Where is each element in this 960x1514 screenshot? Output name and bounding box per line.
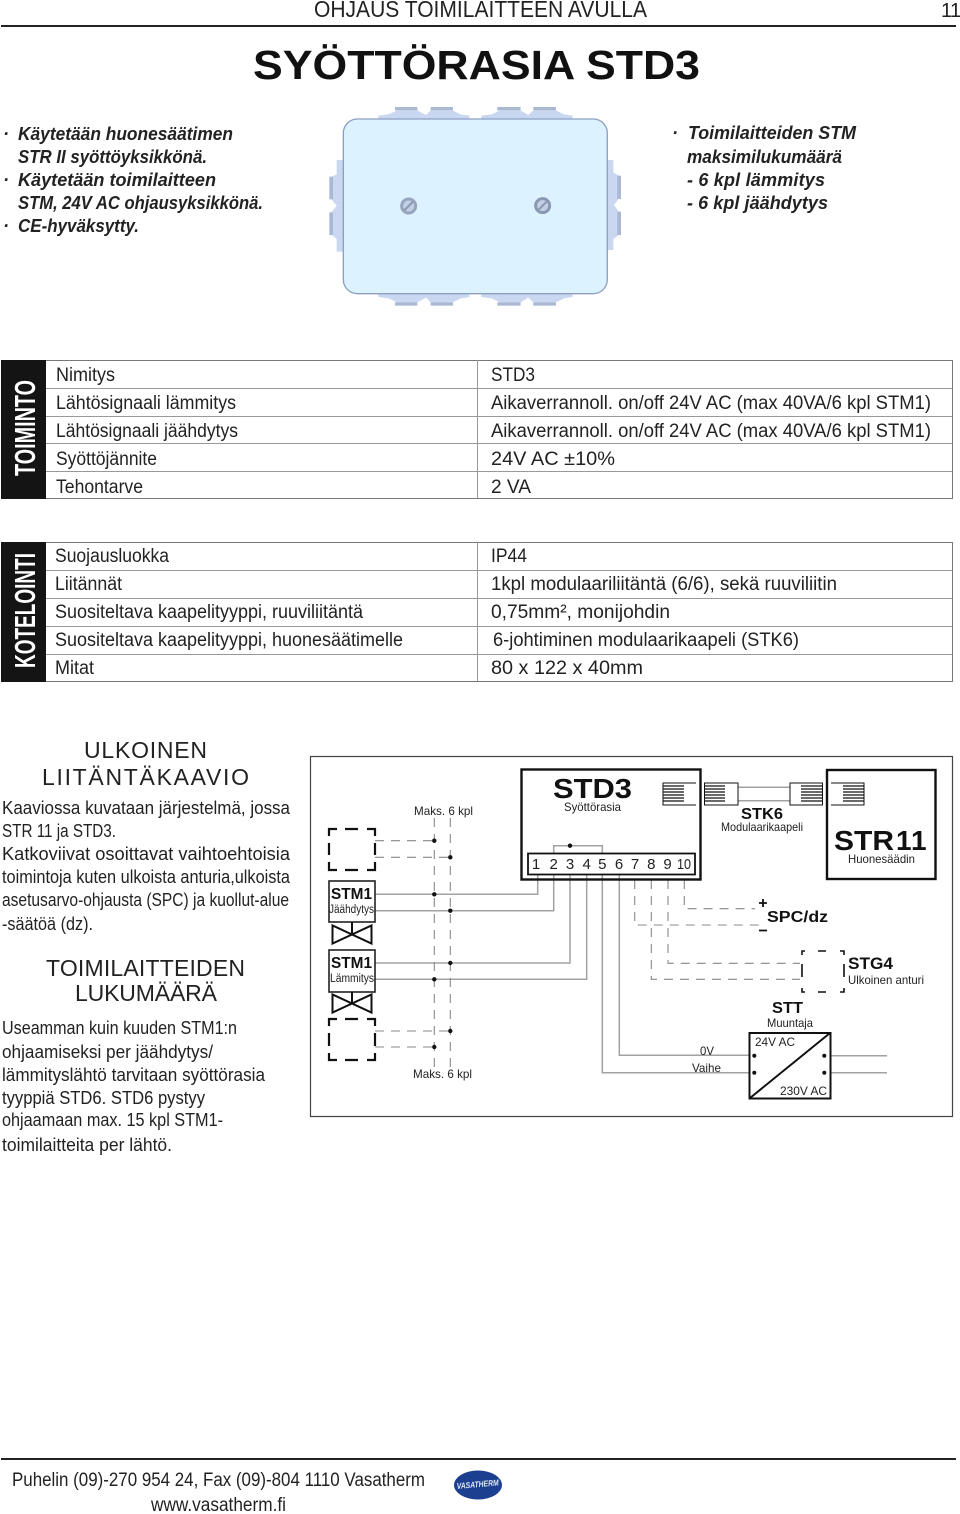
text block: actuator limits: - 6 kpl jäähdytys	[687, 193, 828, 213]
footer: Puhelin (09)-270 954 24, Fax (09)-804 1110 Vasatherm	[12, 1470, 425, 1491]
valve heating	[332, 992, 372, 1012]
panel: TOIMINTO table: Syöttöjännite	[56, 449, 157, 470]
STD3 junction box: 9	[663, 856, 672, 873]
panel: TOIMINTO table: 2 VA	[491, 477, 531, 498]
STG4 outdoor sensor: Ulkoinen anturi	[848, 973, 924, 987]
valve cooling	[332, 922, 372, 944]
label: max 6 bottom: Maks. 6 kpl	[413, 1067, 472, 1081]
STT transformer: Muuntaja	[767, 1016, 813, 1030]
STM1 cooling: STM1	[331, 886, 372, 903]
panel: TOIMINTO table: Tehontarve	[56, 477, 143, 498]
STK6 modular cable: STK6	[741, 806, 783, 823]
panel: TOIMINTO table: 24V AC ±10%	[491, 449, 615, 470]
STD3 junction box: STD3	[553, 773, 632, 804]
panel: KOTELOINTI table: 80 x 122 x 40mm	[491, 658, 643, 679]
heading: number of actuators: LUKUMÄÄRÄ	[75, 980, 218, 1006]
heading: external wiring diagram	[42, 737, 249, 790]
text block: actuator limits: - 6 kpl lämmitys	[687, 170, 825, 190]
STT transformer: 24V AC	[755, 1035, 795, 1049]
logo: Vasatherm	[454, 1470, 502, 1500]
STR11 room controller: 1	[911, 825, 927, 856]
panel: TOIMINTO table: Lähtösignaali jäähdytys	[56, 421, 238, 442]
heading: number of actuators	[46, 955, 245, 1006]
text block: number of actuators: toimilaitteita per lähtö.	[2, 1135, 172, 1155]
text block: diagram description: toimintoja kuten ulkoista anturia,ulkoista	[2, 867, 291, 887]
panel: TOIMINTO table: STD3	[491, 365, 535, 386]
heading: external wiring diagram: ULKOINEN	[84, 737, 207, 763]
STR11 room controller: 1	[896, 825, 912, 856]
STG4 outdoor sensor	[802, 951, 924, 992]
STD3 junction box: 3	[566, 856, 574, 873]
panel: KOTELOINTI table: 0,75mm², monijohdin	[491, 602, 670, 623]
text block: number of actuators: ohjaamiseksi per jäähdytys/	[2, 1042, 213, 1062]
title: SYÖTTÖRASIA STD3	[253, 42, 700, 88]
text block: actuator limits: maksimilukumäärä	[687, 147, 842, 167]
STD3 junction box: Syöttörasia	[564, 800, 621, 814]
STM1 cooling	[329, 881, 375, 922]
junction dots	[432, 838, 572, 1049]
STM1 heating: STM1	[331, 955, 372, 972]
STT transformer: STT	[772, 1000, 804, 1017]
text block: usage bullets: Käytetään toimilaitteen	[18, 170, 216, 190]
optional actuator bottom	[329, 1019, 375, 1060]
optional actuator top	[329, 829, 375, 870]
text block: number of actuators: Useamman kuin kuuden STM1:n	[2, 1018, 237, 1038]
text block: usage bullets: ·	[3, 124, 9, 144]
text block: actuator limits: ·	[672, 123, 678, 143]
text block: diagram description	[2, 798, 291, 934]
STM1 heating: Lämmitys	[330, 973, 374, 985]
page header: 1	[941, 0, 952, 22]
STM1 heating	[329, 950, 375, 992]
STD3 junction box: 4	[583, 856, 591, 873]
text block: diagram description: asetusarvo-ohjausta (SPC) ja kuollut-alue	[2, 890, 289, 910]
STK6 modular cable: Modulaarikaapeli	[721, 820, 803, 834]
panel: KOTELOINTI table: Suojausluokka	[55, 546, 169, 567]
text block: usage bullets: CE-hyväksytty.	[18, 216, 139, 236]
panel: wiring diagram	[310, 756, 952, 1116]
heading: number of actuators: TOIMILAITTEIDEN	[46, 955, 245, 981]
panel: KOTELOINTI table: Liitännät	[55, 574, 123, 595]
text block: usage bullets: STR II syöttöyksikkönä.	[18, 147, 207, 167]
STD3 junction box: 2	[550, 856, 558, 873]
label: phase: Vaihe	[692, 1061, 721, 1075]
panel: KOTELOINTI table: Suositeltava kaapelityyppi, huonesäätimelle	[55, 630, 403, 651]
text block: diagram description: -säätöä (dz).	[2, 914, 93, 934]
panel: TOIMINTO table: Aikaverrannoll. on/off 24V AC (max 40VA/6 kpl STM1)	[491, 421, 931, 442]
panel: TOIMINTO table: TOIMINTO	[10, 380, 42, 476]
text block: usage bullets: ·	[3, 216, 9, 236]
wiring: dashed optional connections	[375, 818, 800, 1068]
product image: junction box	[329, 107, 621, 306]
STG4 outdoor sensor: STG4	[848, 955, 894, 973]
STD3 junction box: 1	[532, 856, 540, 873]
text block: usage bullets	[3, 124, 263, 236]
label: 0V: 0V	[700, 1044, 714, 1058]
STD3 junction box: 6	[615, 856, 623, 873]
text block: usage bullets: Käytetään huonesäätimen	[18, 124, 233, 144]
text block: diagram description: STR 11 ja STD3.	[2, 821, 116, 841]
panel: TOIMINTO table: Lähtösignaali lämmitys	[56, 393, 236, 414]
text block: usage bullets: STM, 24V AC ohjausyksikkönä.	[18, 193, 263, 213]
footer	[1, 1458, 956, 1514]
STT transformer: 230V AC	[780, 1084, 827, 1098]
STD3 junction box: 7	[631, 856, 639, 873]
STR11 room controller: STR	[834, 825, 894, 856]
text block: number of actuators	[2, 1018, 266, 1155]
panel: KOTELOINTI table: IP44	[491, 546, 527, 567]
panel: TOIMINTO table: Nimitys	[56, 365, 115, 386]
STR11 room controller: Huonesäädin	[848, 852, 915, 866]
text block: number of actuators: ohjaamaan max. 15 kpl STM1-	[2, 1110, 223, 1130]
heading: external wiring diagram: LIITÄNTÄKAAVIO	[42, 764, 249, 790]
panel: KOTELOINTI table: Suositeltava kaapelityyppi, ruuviliitäntä	[55, 602, 363, 623]
text block: number of actuators: lämmityslähtö tarvitaan syöttörasia	[2, 1065, 266, 1085]
text block: diagram description: Kaaviossa kuvataan järjestelmä, jossa	[2, 798, 291, 818]
STR11 room controller	[827, 770, 936, 879]
page header	[1, 0, 960, 27]
panel: KOTELOINTI table: 1kpl modulaariliitäntä (6/6), sekä ruuviliitin	[491, 574, 837, 595]
wiring: solid connections	[375, 787, 887, 1073]
SPC/dz input: SPC/dz	[767, 909, 828, 926]
SPC/dz input	[759, 899, 828, 930]
text block: actuator limits	[672, 123, 857, 213]
text block: number of actuators: tyyppiä STD6. STD6 pystyy	[2, 1088, 205, 1108]
label: max 6 top: Maks. 6 kpl	[414, 804, 473, 818]
panel: KOTELOINTI table: Mitat	[55, 658, 95, 679]
STD3 junction box	[522, 770, 700, 880]
STM1 cooling: Jäähdytys	[329, 904, 374, 916]
panel: KOTELOINTI table: 6-johtiminen modulaarikaapeli (STK6)	[493, 630, 799, 651]
text block: actuator limits: Toimilaitteiden STM	[688, 123, 857, 143]
panel: TOIMINTO table	[1, 360, 952, 499]
logo: Vasatherm: VASATHERM	[456, 1477, 500, 1491]
text block: usage bullets: ·	[3, 170, 9, 190]
STT transformer	[750, 1000, 830, 1098]
panel: KOTELOINTI table	[1, 542, 952, 682]
STD3 junction box: 10	[677, 856, 691, 873]
panel: TOIMINTO table: Aikaverrannoll. on/off 24V AC (max 40VA/6 kpl STM1)	[491, 393, 931, 414]
text block: diagram description: Katkoviivat osoittavat vaihtoehtoisia	[2, 844, 291, 864]
panel: KOTELOINTI table: KOTELOINTI	[10, 553, 42, 668]
STD3 junction box: 8	[647, 856, 655, 873]
STD3 junction box: 5	[598, 856, 606, 873]
STK6 modular cable	[704, 783, 822, 834]
